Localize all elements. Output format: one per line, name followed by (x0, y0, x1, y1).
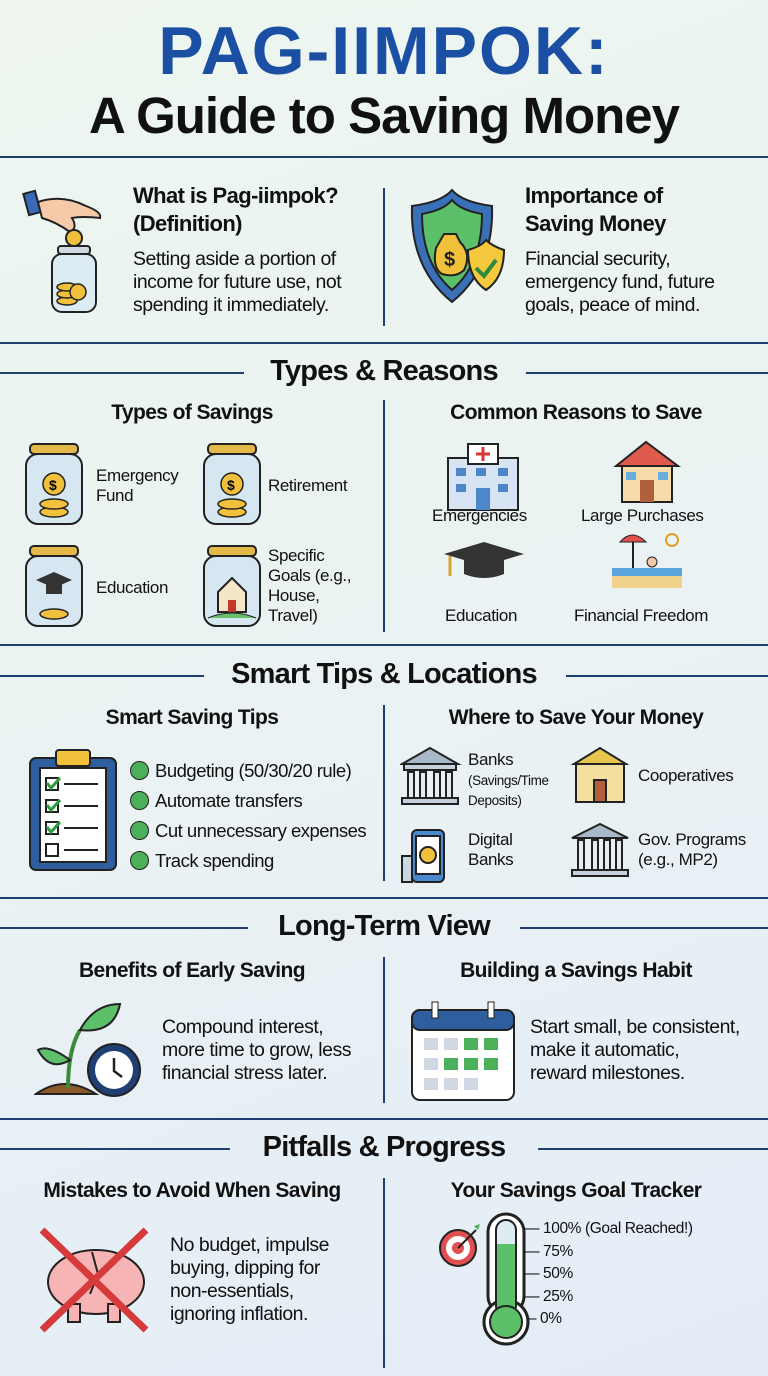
chart: thermometer (439, 1212, 530, 1346)
panel: where to save (400, 706, 746, 883)
panel: reasons to save: Education (445, 606, 517, 625)
text: importance: Financial security, (525, 248, 670, 270)
panel: where to save: Digital (468, 830, 512, 849)
panel: types of savings: Emergency (96, 466, 178, 485)
text: importance (525, 248, 715, 316)
section heading: Types & Reasons: Types & Reasons (270, 355, 498, 387)
panel: where to save: (e.g., MP2) (638, 850, 718, 869)
scale labels: — 50% (524, 1265, 573, 1282)
heading: importance: Saving Money (525, 211, 666, 236)
jar items (25, 443, 261, 627)
heading: mistakes: Mistakes to Avoid When Saving (43, 1179, 341, 1202)
text: benefits (162, 1016, 351, 1084)
section heading: Smart Tips & Locations: Smart Tips & Locations (231, 658, 537, 690)
scale labels: — 25% (524, 1288, 573, 1304)
text: definition (133, 248, 342, 316)
text: benefits: more time to grow, less (162, 1039, 351, 1061)
panel: reasons to save (432, 401, 708, 625)
text: definition: spending it immediately. (133, 294, 329, 316)
heading: where: Where to Save Your Money (449, 706, 703, 729)
list: tips: Automate transfers (155, 790, 302, 811)
icon: hand coin jar (22, 190, 102, 313)
icon: plant clock (34, 1003, 141, 1097)
list: tips: Budgeting (50/30/20 rule) (155, 760, 351, 781)
text: definition: Setting aside a portion of (133, 248, 336, 270)
heading: definition (133, 183, 338, 236)
panel: types of savings: Education (96, 578, 168, 597)
text: benefits: financial stress later. (162, 1062, 327, 1084)
panel: mistakes (40, 1179, 341, 1332)
text: habit: make it automatic, (530, 1039, 679, 1061)
title: PAG-IIMPOK: (158, 13, 610, 89)
panel: types of savings: Fund (96, 486, 133, 505)
panel: where to save: Banks (468, 850, 513, 869)
panel: definition (22, 183, 342, 316)
list: tips: Cut unnecessary expenses (155, 820, 366, 841)
section heading: Long-Term View: Long-Term View (278, 910, 490, 942)
text: habit: reward milestones. (530, 1062, 685, 1084)
panel: where to save: Cooperatives (638, 766, 733, 785)
icon: broken piggy (40, 1228, 148, 1332)
panel: where to save: Banks (468, 750, 513, 769)
text: benefits: Compound interest, (162, 1016, 323, 1038)
panel: types of savings: House, (268, 586, 319, 605)
scale labels: — 100% (Goal Reached!) (524, 1220, 693, 1237)
panel: types of savings: Travel) (268, 606, 317, 625)
panel: savings habit (411, 959, 740, 1101)
panel: importance (410, 183, 715, 316)
panel: where to save: Gov. Programs (638, 830, 746, 849)
text: mistakes (170, 1234, 329, 1325)
icons: banks (400, 746, 630, 883)
icon: shield: $ (444, 249, 455, 271)
heading: types of savings: Types of Savings (111, 401, 273, 424)
text: mistakes: buying, dipping for (170, 1257, 320, 1279)
list: tips: Track spending (155, 850, 274, 871)
title (89, 13, 680, 144)
section heading: Pitfalls & Progress: Pitfalls & Progress (263, 1131, 505, 1163)
scale labels: — 75% (524, 1242, 573, 1260)
panel: where to save: (Savings/Time (468, 773, 549, 788)
list: tips (130, 760, 366, 871)
heading: tracker: Your Savings Goal Tracker (451, 1179, 701, 1202)
panel: benefits of early saving (34, 959, 351, 1097)
text: mistakes: ignoring inflation. (170, 1303, 308, 1325)
panel: types of savings (25, 401, 351, 627)
heading: habit: Building a Savings Habit (460, 959, 692, 982)
text: mistakes: No budget, impulse (170, 1234, 329, 1256)
panel: types of savings: Goals (e.g., (268, 566, 351, 585)
icon: clipboard (29, 749, 117, 871)
heading: importance (525, 183, 666, 236)
scale labels (524, 1220, 693, 1327)
text: habit: Start small, be consistent, (530, 1016, 740, 1038)
text: importance: emergency fund, future (525, 271, 715, 293)
text: definition: income for future use, not (133, 271, 341, 293)
icon: calendar (411, 1002, 515, 1101)
panel: where to save: Deposits) (468, 793, 521, 808)
heading: definition: (Definition) (133, 211, 242, 236)
text: importance: goals, peace of mind. (525, 294, 700, 316)
heading: reasons: Common Reasons to Save (450, 401, 702, 424)
panel: smart saving tips (29, 706, 366, 871)
text: mistakes: non-essentials, (170, 1280, 294, 1302)
panel: types of savings: Retirement (268, 476, 347, 495)
title: A Guide to Saving Money (89, 87, 679, 144)
heading: definition: What is Pag-iimpok? (133, 183, 338, 208)
scale labels: – 0% (528, 1310, 562, 1327)
panel: reasons to save: Emergencies (432, 506, 527, 525)
jar items: $ (49, 477, 57, 493)
heading: importance: Importance of (525, 183, 663, 208)
panel: types of savings: Specific (268, 546, 324, 565)
icons: reasons (444, 440, 682, 588)
icon: shield (410, 188, 505, 304)
text: habit (530, 1016, 740, 1084)
panel: reasons to save: Financial Freedom (574, 606, 708, 625)
jar items: $ (227, 477, 235, 493)
heading: benefits: Benefits of Early Saving (79, 959, 305, 982)
panel: reasons to save: Large Purchases (581, 506, 704, 525)
heading: tips: Smart Saving Tips (106, 706, 278, 729)
panel: goal tracker (439, 1179, 702, 1346)
